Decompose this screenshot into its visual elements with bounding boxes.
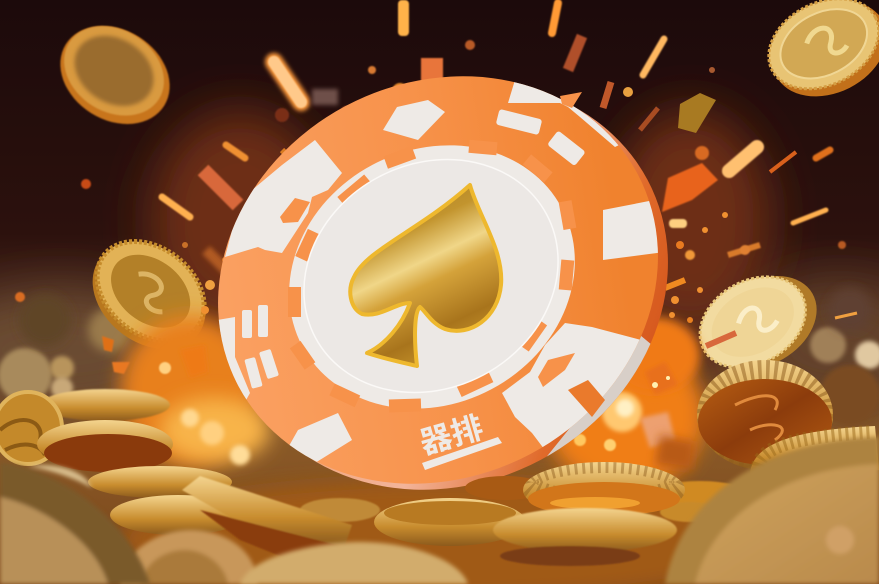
chip: shaded edge band bbox=[568, 380, 605, 417]
coin: front centre ridged bbox=[523, 462, 685, 514]
chip: white edge blocks bbox=[218, 82, 658, 470]
chip: white centre ring bbox=[243, 96, 621, 458]
chip: inner line bbox=[263, 116, 599, 436]
chip: orange face bbox=[146, 0, 730, 560]
poker chip bbox=[218, 76, 668, 490]
coin: tilted blurred bbox=[182, 476, 352, 560]
coin: floating top right bbox=[753, 0, 879, 116]
coin: big blurred bottom right bbox=[665, 437, 879, 584]
explosion glow: right bbox=[545, 163, 718, 490]
coin: right flat ridged bbox=[750, 426, 879, 480]
chip: side rim bbox=[156, 6, 740, 566]
chip: rim white patch bbox=[547, 336, 650, 456]
coin: big blurred bottom left bbox=[0, 462, 150, 584]
coin: front blurred bottom left small bbox=[120, 530, 258, 584]
icon: gold spade bbox=[350, 185, 501, 366]
coin: front blurred centre bbox=[240, 542, 468, 584]
coin: left mid tilted bbox=[72, 220, 228, 371]
explosion glow: left bbox=[102, 315, 270, 465]
coin: floating top left bbox=[42, 6, 188, 144]
coin: centre flat bbox=[374, 498, 526, 546]
chip: orange diamonds on blocks bbox=[280, 92, 582, 387]
chip: ring dashes bbox=[288, 140, 576, 413]
sparks bbox=[15, 0, 857, 346]
chip: lettering: 器排 bbox=[416, 410, 487, 461]
coin: large dark right bbox=[697, 360, 833, 470]
coin pile: back row bbox=[0, 389, 750, 535]
coin: right cream tilted bbox=[684, 254, 833, 391]
coin: front right flat blurred bbox=[493, 508, 677, 566]
